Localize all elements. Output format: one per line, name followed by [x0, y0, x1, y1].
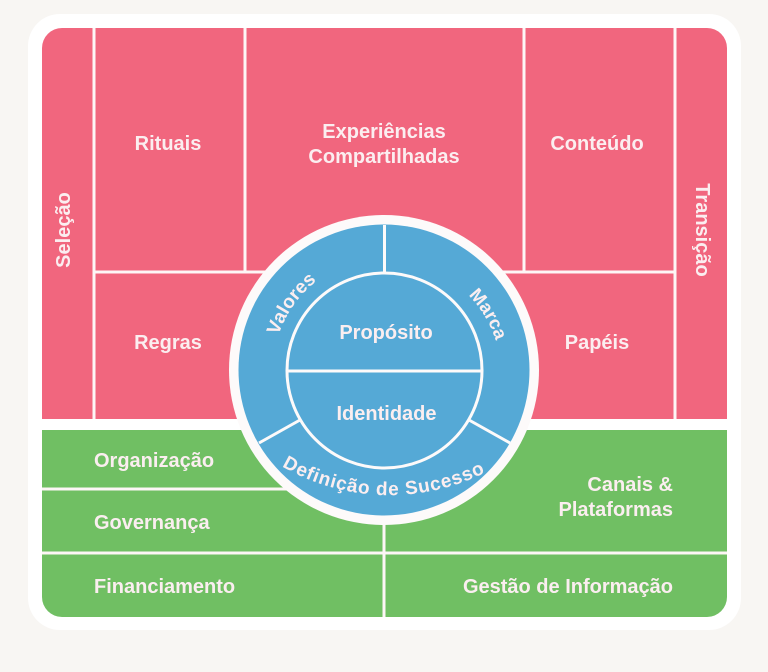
- label: Experiências Compartilhadas: Experiências: [322, 121, 446, 143]
- label: Papéis: Papéis: [565, 332, 629, 354]
- label: Organização: Organização: [94, 450, 214, 472]
- circle: white ring: [229, 215, 539, 525]
- panel: red upper section: [42, 28, 727, 419]
- label: Canais & Plataformas: Canais &: [587, 474, 673, 496]
- circle: blue disc: [238, 224, 530, 516]
- label: Identidade: Identidade: [336, 403, 437, 425]
- label: Valores: Valores: [266, 275, 315, 331]
- label: Rituais: Rituais: [135, 133, 201, 155]
- label: Propósito: Propósito: [339, 322, 433, 344]
- label: Canais & Plataformas: Plataformas: [558, 499, 673, 521]
- central circle diagram: [229, 215, 539, 525]
- label: Experiências Compartilhadas: Compartilhadas: [308, 146, 460, 168]
- label: Conteúdo: Conteúdo: [550, 133, 644, 155]
- label: Governança: Governança: [94, 512, 210, 534]
- framework panels: [42, 28, 727, 617]
- label: Marca: Marca: [469, 288, 504, 341]
- label: Transição: Transição: [691, 183, 713, 277]
- panel: green lower section: [42, 430, 727, 617]
- label: Seleção: Seleção: [53, 192, 75, 268]
- label: Gestão de Informação: Gestão de Informação: [463, 576, 673, 598]
- label: Regras: Regras: [134, 332, 202, 354]
- label: Definição de Sucesso: Definição de Sucesso: [282, 456, 484, 496]
- label: Financiamento: Financiamento: [94, 576, 235, 598]
